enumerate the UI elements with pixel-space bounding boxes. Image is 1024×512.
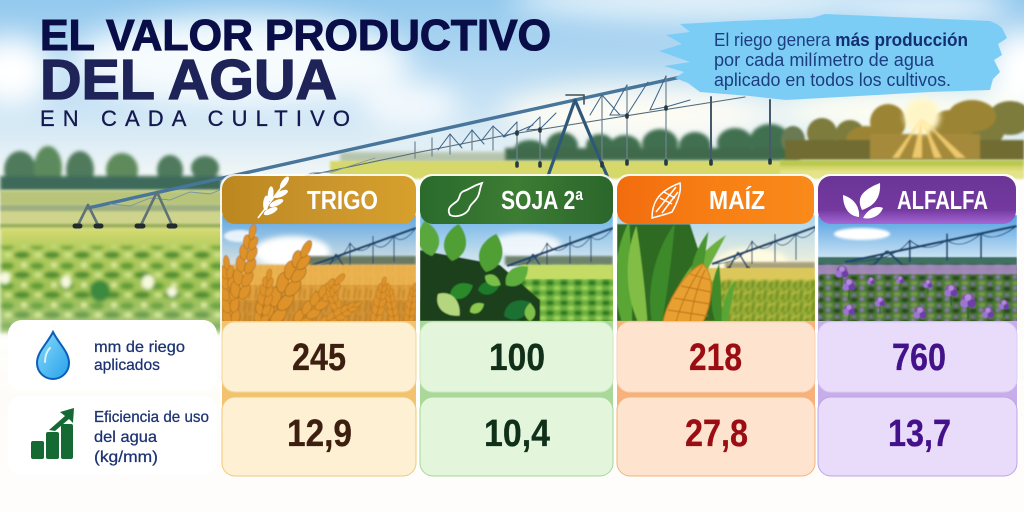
label text (94, 339, 185, 374)
title (40, 11, 551, 131)
brush stroke shape (659, 14, 1007, 100)
irrigation pivot (75, 75, 770, 226)
foreground crop, left (0, 228, 224, 333)
distant field (0, 160, 1024, 230)
label text: mm de riego (94, 339, 185, 356)
value: alfalfa eficiencia: 13,7 (888, 413, 951, 455)
trees, centre (340, 124, 800, 163)
label text: Eficiencia de uso (94, 409, 209, 426)
callout text: aplicado en todos los cultivos. (714, 70, 951, 90)
panel: maiz (610, 174, 820, 478)
fade to white at the bottom (0, 295, 1024, 485)
callout: brush stroke message (659, 14, 1007, 100)
value: trigo riego (222, 322, 416, 392)
title line 1: EL VALOR PRODUCTIVO (40, 11, 551, 60)
value: soja riego (420, 322, 613, 392)
icon: rising bars with arrow (31, 408, 74, 459)
callout text (714, 30, 968, 90)
header: maiz (617, 176, 814, 224)
label text: del agua (94, 429, 157, 446)
photo: wheat field (222, 215, 416, 321)
heading: soja: SOJA 2ª (501, 185, 583, 215)
corn cob (663, 264, 711, 322)
icon: alfalfa leaves (843, 183, 883, 219)
trees, left (0, 146, 222, 191)
value: trigo riego: 245 (292, 337, 346, 379)
icon: water drop (37, 332, 69, 379)
panel: soja (414, 174, 620, 478)
header: alfalfa (818, 176, 1016, 224)
photo: corn field (617, 215, 815, 321)
callout text: por cada milímetro de agua (714, 50, 935, 70)
icon: corn (652, 183, 680, 218)
icon: soybean pod (449, 183, 482, 216)
value: maiz riego (617, 322, 815, 392)
label text (94, 409, 209, 466)
value: trigo eficiencia (222, 397, 416, 476)
panel: alfalfa (816, 174, 1023, 478)
callout text: El riego genera más producción (714, 30, 968, 50)
title line 2: DEL AGUA (40, 48, 337, 112)
value: maiz riego: 218 (689, 337, 742, 379)
heading: alfalfa: ALFALFA (897, 185, 988, 215)
value: soja eficiencia: 10,4 (484, 413, 550, 455)
heading: trigo: TRIGO (307, 185, 378, 215)
row label: mm de riego (8, 320, 217, 391)
value: maiz eficiencia (617, 397, 815, 476)
panel: trigo (215, 174, 422, 478)
icon: wheat (258, 175, 291, 218)
photo: alfalfa field (818, 215, 1023, 328)
value: alfalfa riego: 760 (892, 337, 946, 379)
sun and rays (892, 98, 966, 158)
value: alfalfa riego (818, 322, 1017, 392)
label text: (kg/mm) (94, 449, 158, 466)
heading: maiz: MAÍZ (709, 185, 765, 215)
label text: aplicados (94, 357, 160, 374)
header: trigo (222, 175, 416, 224)
row label: eficiencia (8, 396, 217, 475)
value: alfalfa eficiencia (818, 397, 1017, 476)
value: trigo eficiencia: 12,9 (287, 413, 352, 455)
value: maiz eficiencia: 27,8 (685, 413, 748, 455)
value: soja riego: 100 (489, 337, 545, 379)
title line 3: EN CADA CULTIVO (40, 106, 350, 131)
trees, right (781, 100, 1024, 160)
photo: soybean plants (414, 215, 620, 325)
header: soja (420, 176, 613, 224)
value: soja eficiencia (420, 397, 613, 476)
